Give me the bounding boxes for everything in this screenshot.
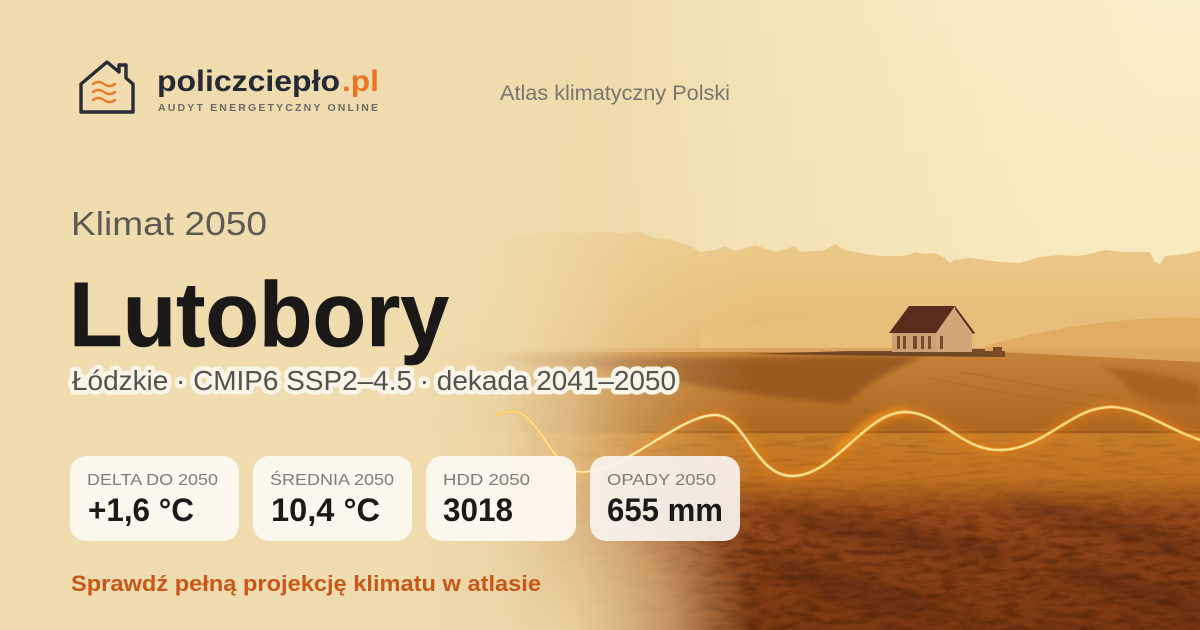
stat value: 10,4 °C: [271, 492, 380, 528]
stat card: average: [253, 456, 412, 541]
subtitle: Łódzkie · CMIP6 SSP2–4.5 · dekada 2041–2050: [72, 365, 676, 396]
stat card: delta: [70, 456, 239, 541]
logo tagline: AUDYT ENERGETYCZNY ONLINE: [158, 102, 378, 114]
stat card: precipitation: [590, 456, 740, 541]
icon: house with heat waves: [81, 62, 133, 112]
stat label: ŚREDNIA 2050: [270, 470, 394, 489]
glowing wave line: [497, 407, 1200, 476]
stat value: +1,6 °C: [88, 492, 194, 528]
header label: Atlas klimatyczny Polski: [500, 82, 730, 105]
stat label: OPADY 2050: [607, 472, 716, 489]
title: Lutobory: [69, 264, 449, 366]
stat label: HDD 2050: [443, 472, 530, 489]
logo: [81, 62, 379, 114]
call to action: Sprawdź pełną projekcję klimatu w atlasie: [71, 571, 541, 596]
logo wordmark: policzciepło: [157, 65, 340, 98]
background landscape: [467, 0, 1200, 630]
stat label: DELTA DO 2050: [87, 472, 218, 489]
logo domain suffix: .pl: [342, 65, 379, 98]
stat value: 655 mm: [607, 492, 723, 528]
stat value: 3018: [443, 492, 513, 528]
icon: farmhouse on the hill: [889, 306, 1002, 357]
dark field streaks: [740, 495, 1200, 620]
eyebrow: Klimat 2050: [71, 205, 267, 242]
stat card: HDD: [426, 456, 576, 541]
